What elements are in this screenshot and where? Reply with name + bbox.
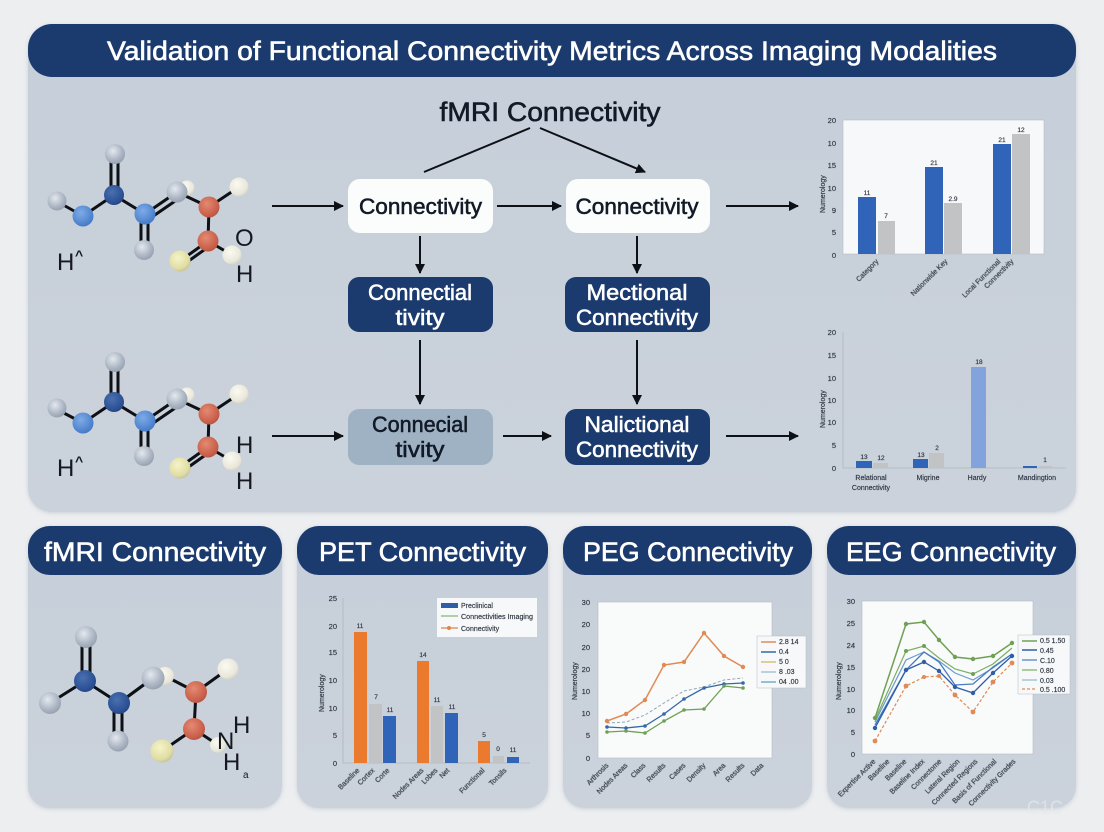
bar chart: upper: 10 xyxy=(828,139,836,148)
line chart: PEG: Results xyxy=(725,762,747,784)
line chart: EEG: 24 xyxy=(847,641,855,650)
chart legend: 0.5 .100 xyxy=(1040,687,1065,694)
line chart: EEG: Lateral Region xyxy=(924,758,961,796)
bar chart: lower: 13 xyxy=(917,452,925,459)
chart legend: 0.5 1.50 xyxy=(1040,638,1065,645)
box: connectivity 2 xyxy=(566,179,710,233)
bar chart: lower: 0 xyxy=(832,464,836,473)
bar chart: PET: 0 xyxy=(496,746,500,753)
bar chart: PET: Functional xyxy=(459,767,487,795)
line chart: EEG: Expertise Active xyxy=(837,758,877,799)
panel: fMRI Connectivity xyxy=(28,526,282,808)
panel: PEG Connectivity xyxy=(563,526,812,808)
bar chart: lower: 18 xyxy=(975,359,983,366)
box: mectional connectivity xyxy=(565,277,710,332)
bar chart: PET: 0 xyxy=(333,759,337,768)
line chart: PEG xyxy=(572,598,806,796)
panel: EEG Connectivity xyxy=(827,526,1076,808)
molecule: lower: ^ xyxy=(75,453,83,469)
bar chart: upper: 12 xyxy=(1017,127,1025,134)
bar chart: PET: 7 xyxy=(374,694,378,701)
line chart: EEG: 5 xyxy=(851,728,855,737)
bar chart: PET: 10 xyxy=(329,676,337,685)
line chart: EEG: Baseline Index xyxy=(889,758,927,796)
bar chart: lower: Migrine xyxy=(917,475,940,482)
arrow: upper molecule to box xyxy=(272,205,343,207)
chart legend: 0.03 xyxy=(1040,678,1054,685)
line chart: EEG: 10 xyxy=(847,706,855,715)
panel heading: PET Connectivity xyxy=(319,537,526,567)
bar chart: upper: 20 xyxy=(828,116,836,125)
molecule: upper: H xyxy=(236,261,253,288)
molecule: fMRI xyxy=(39,626,250,781)
line chart: EEG: 15 xyxy=(847,663,855,672)
heading: fMRI Connectivity: fMRI Connectivity xyxy=(440,97,661,127)
line chart: EEG xyxy=(836,597,1070,808)
line chart: PEG: Numerology xyxy=(572,662,579,700)
bar chart: PET: 14 xyxy=(419,652,427,659)
line chart: PEG: 20 xyxy=(582,665,590,674)
line chart: PEG: 10 xyxy=(582,709,590,718)
line chart: EEG: Basis of Functional xyxy=(952,758,999,805)
chart legend xyxy=(757,636,806,688)
bar chart: PET: Tonsils xyxy=(488,767,509,788)
bar chart: lower: 1 xyxy=(1043,457,1047,464)
box: mectional connectivity: Mectional xyxy=(586,280,688,305)
molecule: fMRI: N xyxy=(217,728,234,755)
chart legend: 2.8 14 xyxy=(779,639,799,646)
line chart: PEG: Data xyxy=(750,762,765,778)
bar chart: PET: Nodes Areas xyxy=(392,767,426,801)
bar chart: upper: Nationwide Key xyxy=(910,258,950,298)
line chart: PEG: Class xyxy=(630,762,648,780)
arrow: down left 2 xyxy=(419,340,421,404)
molecule: lower xyxy=(48,352,253,495)
watermark: C1C xyxy=(1027,798,1063,819)
bar chart: lower: 13 xyxy=(860,454,868,461)
bar chart: upper: Category xyxy=(855,258,881,284)
line chart: EEG: Connected Regions xyxy=(931,758,980,807)
bar chart: lower: Relational xyxy=(855,475,887,482)
bar chart: lower: 2 xyxy=(935,445,939,452)
box: connectivity 1: Connectivity xyxy=(359,194,482,219)
line chart: EEG: Connectivity Grades xyxy=(968,758,1018,808)
molecule: upper xyxy=(48,144,254,288)
molecule: fMRI: H xyxy=(223,749,240,776)
arrow: heading to right box xyxy=(540,128,645,172)
line chart: PEG: 0 xyxy=(586,754,590,763)
molecule: fMRI: H xyxy=(233,712,250,739)
chart legend: 0.4 xyxy=(779,649,789,656)
bar chart: PET: Numerology xyxy=(319,674,326,712)
bar chart: PET: 5 xyxy=(333,731,337,740)
bar chart: PET: 11 xyxy=(510,747,517,754)
bar chart: lower: 5 xyxy=(832,441,836,450)
box: connecial tivity: tivity xyxy=(396,437,444,462)
bar chart: lower: Connectivity xyxy=(852,485,891,492)
bar chart: PET: Net xyxy=(439,767,451,780)
chart legend: 04 .00 xyxy=(779,679,799,686)
molecule: upper: ^ xyxy=(75,247,83,263)
chart legend: C.10 xyxy=(1040,658,1055,665)
box: connecial tivity xyxy=(348,409,493,465)
line chart: PEG: Density xyxy=(686,762,708,784)
chart legend xyxy=(1018,635,1070,694)
bar chart: PET: 11 xyxy=(434,697,441,704)
box: connecial tivity: Connecial xyxy=(372,412,468,437)
bar chart: lower: Hardy xyxy=(968,475,987,482)
panel heading: PEG Connectivity xyxy=(583,537,793,567)
bar chart: lower: 10 xyxy=(828,374,836,383)
arrow: box to box upper xyxy=(497,205,561,207)
chart legend: 0.80 xyxy=(1040,668,1054,675)
line chart: EEG: 0 xyxy=(851,750,855,759)
chart legend: Preclinical xyxy=(461,603,493,610)
box: nalictional connectivity: Nalictional xyxy=(584,412,690,437)
line chart: PEG: Results xyxy=(646,762,668,784)
arrow: box to lower chart xyxy=(726,435,798,437)
bar chart: lower: 20 xyxy=(828,328,836,337)
arrow: down right 2 xyxy=(636,340,638,404)
bar chart: upper: Connectivity xyxy=(983,258,1016,290)
bar chart: lower: 10 xyxy=(828,396,836,405)
box: connectial tivity: Connectial xyxy=(368,280,472,305)
chart legend xyxy=(437,598,537,637)
bar chart: PET: 10 xyxy=(329,704,337,713)
title xyxy=(28,24,1076,77)
arrow: heading to left box xyxy=(424,128,530,172)
bar chart: PET: Baseline xyxy=(337,767,361,791)
bar chart: upper: 21 xyxy=(998,137,1006,144)
line chart: EEG: Numerology xyxy=(836,662,843,700)
box: connectial tivity xyxy=(348,277,493,332)
bar chart: PET: 25 xyxy=(329,594,337,603)
molecule: upper: H xyxy=(57,249,74,276)
line chart: EEG: 25 xyxy=(847,619,855,628)
bar chart: upper: 9 xyxy=(832,206,836,215)
molecule: upper: O xyxy=(235,225,254,252)
panel heading xyxy=(563,526,812,575)
panel heading xyxy=(827,526,1076,575)
line chart: PEG: 20 xyxy=(582,620,590,629)
bar chart: PET: 11 xyxy=(449,704,456,711)
bar chart: upper: 11 xyxy=(864,190,871,197)
title: Validation of Functional Connectivity Metrics Across Imaging Modalities xyxy=(107,36,997,66)
chart legend: 5 0 xyxy=(779,659,789,666)
line chart: EEG: Baseline xyxy=(867,758,891,782)
box: nalictional connectivity: Connectivity xyxy=(576,437,698,462)
molecule: lower: H xyxy=(236,468,253,495)
bar chart: upper xyxy=(820,116,1044,299)
line chart: PEG: Area xyxy=(712,762,727,778)
bar chart: upper: 0 xyxy=(832,251,836,260)
panel heading xyxy=(28,526,282,575)
line chart: PEG: Arthrosis xyxy=(586,762,611,787)
chart legend: Connectivities Imaging xyxy=(461,614,533,621)
bar chart: lower: 12 xyxy=(877,455,885,462)
line chart: PEG: 30 xyxy=(582,598,590,607)
arrow: lower molecule to box xyxy=(272,435,343,437)
line chart: EEG: 10 xyxy=(847,685,855,694)
panel heading xyxy=(297,526,548,575)
bar chart: lower xyxy=(820,328,1066,492)
molecule: lower: H xyxy=(57,455,74,482)
arrow: down right 1 xyxy=(636,236,638,273)
bar chart: upper: 5 xyxy=(832,228,836,237)
panel heading: EEG Connectivity xyxy=(846,537,1056,567)
bar chart: upper: 10 xyxy=(828,184,836,193)
molecule: lower: H xyxy=(236,432,253,459)
chart legend: 8 .03 xyxy=(779,669,795,676)
bar chart: PET: Cortex xyxy=(357,767,377,787)
bar chart: upper: Local Functional xyxy=(961,258,1003,299)
bar chart: PET xyxy=(319,594,537,801)
line chart: EEG: Baseline xyxy=(884,758,908,782)
bar chart: upper: 7 xyxy=(884,213,888,220)
bar chart: lower: Mandingtion xyxy=(1018,475,1056,482)
line chart: PEG: 5 xyxy=(586,731,590,740)
panel heading: fMRI Connectivity xyxy=(44,537,267,567)
bar chart: lower: Numerology xyxy=(820,390,827,428)
bar chart: PET: 15 xyxy=(329,648,337,657)
arrow: box to upper chart xyxy=(726,205,798,207)
line chart: EEG: 30 xyxy=(847,597,855,606)
line chart: PEG: Cases xyxy=(668,762,688,781)
bar chart: upper: 2.9 xyxy=(948,196,958,203)
molecule: fMRI: a xyxy=(243,770,249,781)
bar chart: lower: 15 xyxy=(828,351,836,360)
box: nalictional connectivity xyxy=(565,409,710,465)
box: connectivity 1 xyxy=(348,179,493,233)
box: mectional connectivity: Connectivity xyxy=(576,305,698,330)
bar chart: PET: 11 xyxy=(387,707,394,714)
chart legend: Connectivity xyxy=(461,626,500,633)
bar chart: PET: 11 xyxy=(357,623,364,630)
chart legend: 0.45 xyxy=(1040,648,1054,655)
line chart: PEG: Nodes Areas xyxy=(596,762,630,796)
box: connectivity 2: Connectivity xyxy=(576,194,698,219)
bar chart: PET: 5 xyxy=(482,732,486,739)
bar chart: PET: Corte xyxy=(374,767,391,785)
arrow: box to box lower xyxy=(503,435,551,437)
bar chart: upper: Numerology xyxy=(820,175,827,213)
line chart: PEG: 10 xyxy=(582,687,590,696)
bar chart: PET: Lobes xyxy=(421,767,440,786)
panel: PET Connectivity xyxy=(297,526,548,808)
line chart: EEG: Connectome xyxy=(910,758,943,791)
box: connectial tivity: tivity xyxy=(396,305,444,330)
bar chart: lower: 10 xyxy=(828,418,836,427)
arrow: down left 1 xyxy=(419,236,421,273)
bar chart: upper: 21 xyxy=(930,160,938,167)
bar chart: PET: 20 xyxy=(329,622,337,631)
panel: main workflow xyxy=(28,24,1076,512)
line chart: PEG: 20 xyxy=(582,643,590,652)
bar chart: upper: 15 xyxy=(828,161,836,170)
